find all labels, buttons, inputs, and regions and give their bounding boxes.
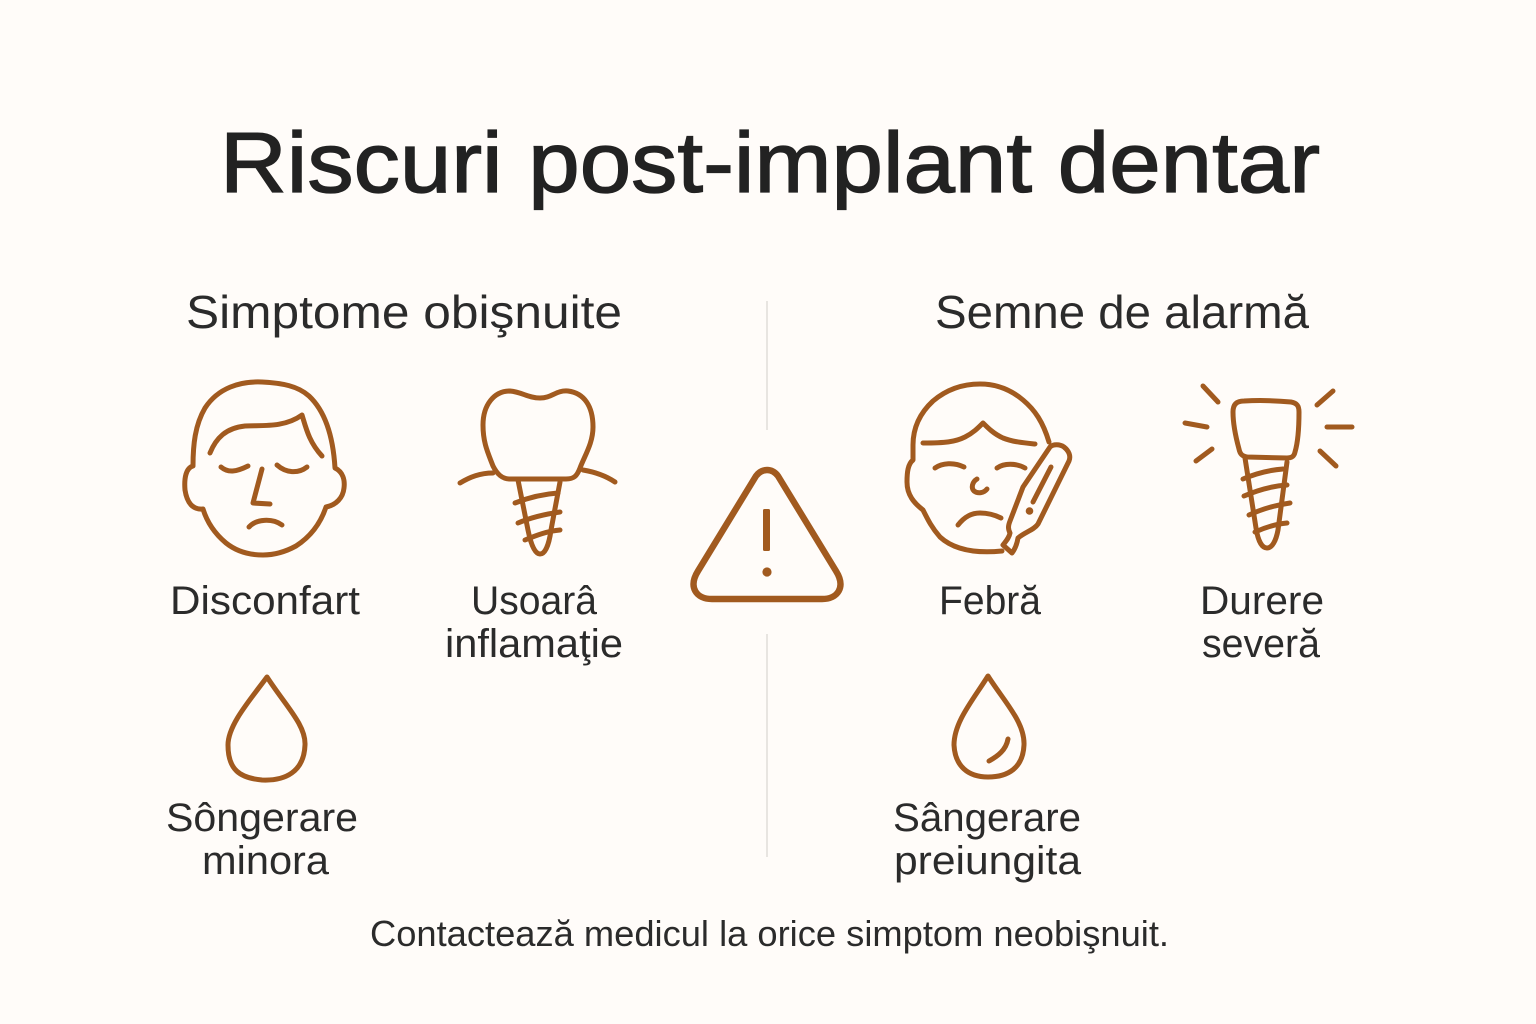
icon: sad face (185, 382, 344, 555)
item: sangerare prelungita (893, 676, 1082, 883)
footer note: Contactează medicul la orice simptom neobişnuit. (370, 913, 1169, 954)
item: disconfart (170, 382, 360, 623)
label: Sôngerare (166, 796, 358, 840)
icon: face with thermometer (907, 384, 1070, 553)
item: febra (907, 384, 1070, 623)
label: Usoarâ (471, 579, 598, 623)
label line 2: severă (1202, 622, 1321, 666)
heading: simptome obisnuite: Simptome obişnuite (186, 286, 622, 338)
label line 2: inflamaţie (445, 622, 623, 666)
item: songerare minora (166, 677, 358, 883)
label: Disconfart (170, 579, 360, 623)
label: Durere (1200, 579, 1324, 623)
icon: drop with highlight (954, 676, 1024, 777)
icon: warning triangle (694, 470, 840, 599)
divider bottom (766, 634, 768, 857)
item: usoara inflamatie (445, 391, 623, 666)
label: Sângerare (893, 796, 1081, 840)
icon: painful implant (1185, 386, 1352, 548)
divider top (766, 301, 768, 430)
label line 2: preiungita (894, 839, 1082, 883)
icon: implant crown with gum (460, 391, 615, 554)
icon: thermometer bulb dot (1026, 507, 1033, 515)
label line 2: minora (202, 839, 330, 883)
panel: simptome obisnuite (166, 286, 623, 883)
panel: semne de alarma (893, 286, 1352, 883)
label: Febră (939, 579, 1042, 623)
item: durere severa (1185, 386, 1352, 666)
icon: drop (228, 677, 305, 780)
heading: semne de alarma: Semne de alarmă (935, 286, 1309, 338)
title: Riscuri post-implant dentar (220, 116, 1320, 211)
